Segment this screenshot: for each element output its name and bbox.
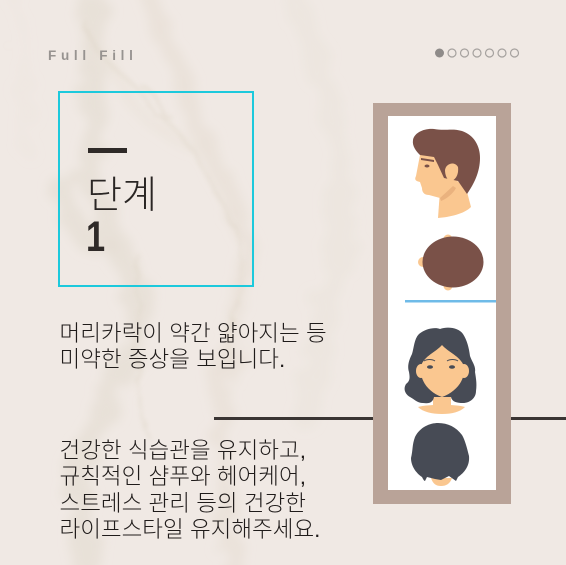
advice text: 스트레스 관리 등의 건강한	[60, 491, 306, 516]
symptom description text	[60, 321, 327, 372]
icon: man top view	[418, 234, 484, 290]
horizontal rule left	[214, 417, 374, 420]
title: step label: 단계	[87, 175, 157, 217]
advice text	[60, 438, 320, 542]
icon: woman back view	[411, 423, 469, 486]
symptom description text: 미약한 증상을 보입니다.	[60, 347, 285, 372]
advice text: 라이프스타일 유지해주세요.	[60, 517, 320, 542]
title: step number: 1	[86, 213, 105, 261]
advice text: 건강한 식습관을 유지하고,	[60, 438, 306, 463]
icon: man side view	[413, 129, 480, 218]
panel: illustration frame	[373, 103, 511, 504]
advice text: 규칙적인 샴푸와 헤어케어,	[60, 464, 306, 489]
symptom description text: 머리카락이 약간 얇아지는 등	[60, 321, 327, 346]
panel: step title box	[58, 91, 254, 287]
title dash	[88, 148, 127, 153]
horizontal rule right	[510, 417, 566, 420]
divider line	[405, 300, 496, 302]
brand label: Full Fill	[48, 48, 138, 63]
icon: woman front view	[405, 328, 476, 414]
pagination dots	[435, 48, 519, 58]
